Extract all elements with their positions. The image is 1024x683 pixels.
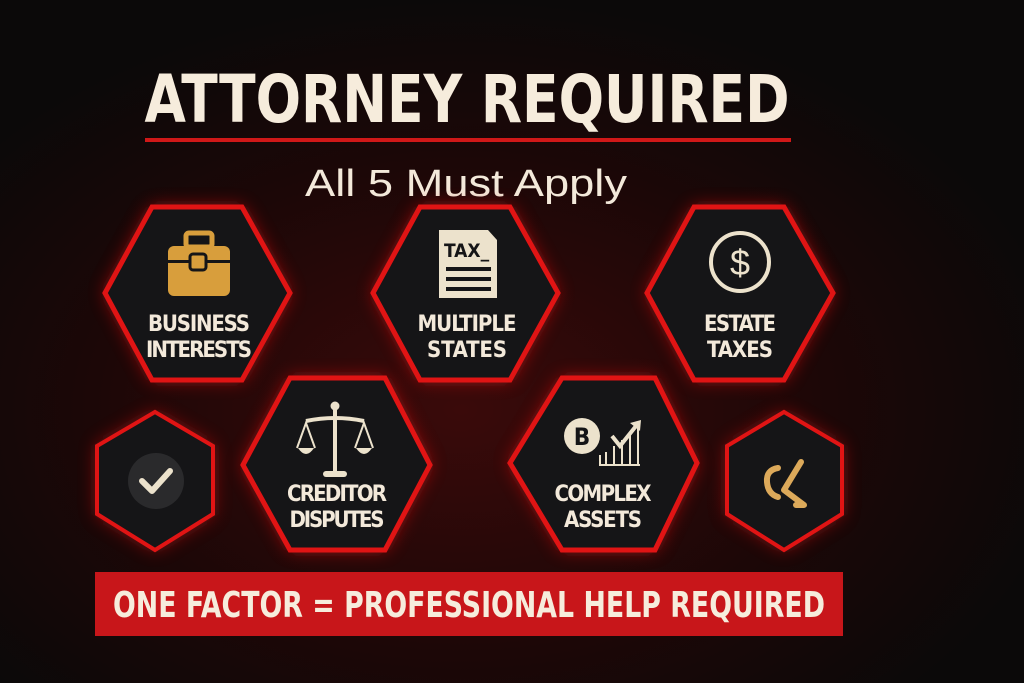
- hex: multiple states: [373, 207, 558, 380]
- label: INTERESTS: [146, 338, 252, 363]
- icon: dollar coin: $: [730, 242, 750, 283]
- hex: business interests: [105, 207, 290, 380]
- label: DISPUTES: [290, 508, 384, 533]
- icon: tax document: TAX_: [444, 240, 490, 262]
- label: COMPLEX: [554, 482, 652, 507]
- hex: estate taxes: [647, 207, 833, 380]
- banner: ONE FACTOR = PROFESSIONAL HELP REQUIRED: [113, 585, 825, 626]
- icon: check circle: [128, 453, 184, 509]
- icon: tax document: [439, 230, 497, 298]
- label: MULTIPLE: [418, 312, 516, 337]
- label: BUSINESS: [148, 312, 250, 337]
- label: STATES: [427, 338, 507, 363]
- hex: gold hook: [727, 412, 842, 550]
- hex: creditor disputes: [243, 378, 430, 550]
- label: TAXES: [707, 338, 773, 363]
- icon: briefcase: [168, 233, 230, 296]
- subtitle: All 5 Must Apply: [305, 163, 627, 205]
- hex: complex assets: [510, 378, 697, 550]
- label: CREDITOR: [287, 482, 387, 507]
- hex: checkmark: [97, 412, 213, 550]
- label: ASSETS: [564, 508, 642, 533]
- icon: bitcoin and chart: B: [574, 423, 590, 451]
- icon: bitcoin and chart: [564, 418, 641, 465]
- title: ATTORNEY REQUIRED: [144, 61, 790, 138]
- icon: gold glyph: [767, 462, 804, 505]
- icon: dollar coin: [711, 233, 769, 291]
- icon: scales: [297, 402, 373, 477]
- label: ESTATE: [704, 312, 776, 337]
- banner: [95, 572, 843, 636]
